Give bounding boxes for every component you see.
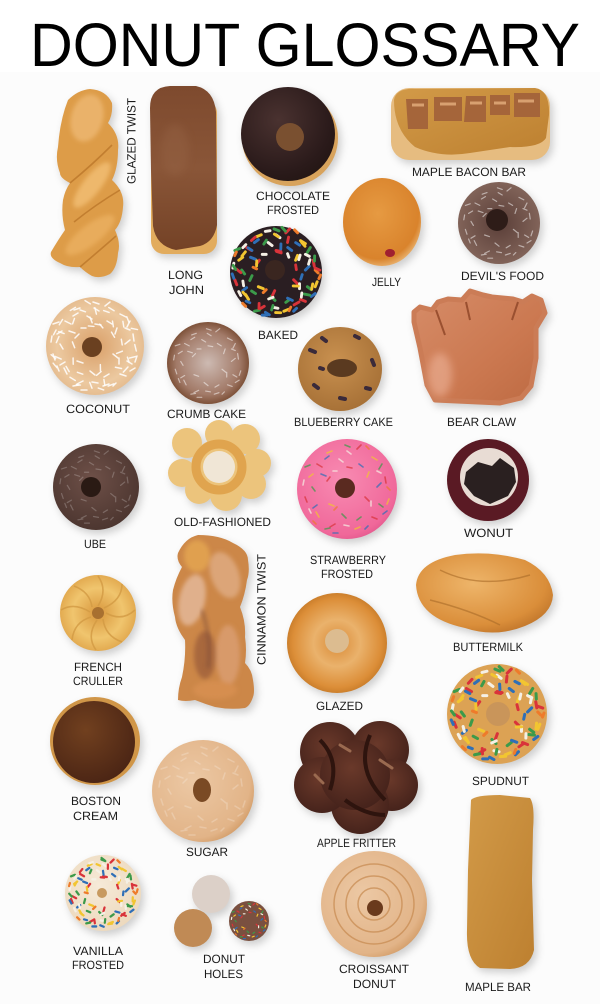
label: boston cream <box>71 794 121 823</box>
donut: jelly <box>343 178 421 266</box>
label: boston cream: BOSTON <box>71 794 121 808</box>
label: strawberry frosted <box>310 553 386 581</box>
donut: glazed twist <box>51 89 123 277</box>
label: sugar: SUGAR <box>186 845 228 859</box>
label: crumb cake: CRUMB CAKE <box>167 407 246 421</box>
label: wonut: WONUT <box>464 526 514 540</box>
label: maple bacon bar: MAPLE BACON BAR <box>412 165 526 179</box>
label: french cruller <box>73 660 123 688</box>
donut: coconut <box>34 285 154 405</box>
label: strawberry frosted: STRAWBERRY <box>310 553 386 567</box>
donut: croissant donut <box>321 851 427 957</box>
donut holes <box>174 875 269 947</box>
label: donut holes <box>203 952 246 981</box>
label: strawberry frosted: FROSTED <box>321 567 373 581</box>
label: donut holes: HOLES <box>204 967 243 981</box>
label: long john <box>168 268 204 297</box>
label: coconut: COCONUT <box>66 402 131 416</box>
donut: wonut <box>447 439 529 521</box>
label: french cruller: FRENCH <box>74 660 122 674</box>
donut: glazed <box>287 593 387 693</box>
label: croissant donut: DONUT <box>353 977 397 991</box>
label: jelly: JELLY <box>372 275 401 289</box>
label: ube: UBE <box>84 537 106 551</box>
label: long john: LONG <box>168 268 203 282</box>
donut: buttermilk <box>416 553 553 633</box>
donut: strawberry frosted <box>297 439 397 539</box>
label: vanilla frosted <box>72 944 124 972</box>
label: apple fritter: APPLE FRITTER <box>317 836 396 850</box>
label: chocolate frosted: FROSTED <box>267 203 319 217</box>
donut: maple bar <box>467 795 534 969</box>
label: maple bar: MAPLE BAR <box>465 980 531 994</box>
label: long john: JOHN <box>169 283 204 297</box>
label: bear claw: BEAR CLAW <box>447 415 517 429</box>
label: devil's food: DEVIL'S FOOD <box>461 269 544 283</box>
label: cinnamon twist: CINNAMON TWIST <box>254 553 268 665</box>
label: vanilla frosted: VANILLA <box>73 944 123 958</box>
label: old-fashioned: OLD-FASHIONED <box>174 515 271 529</box>
label: croissant donut: CROISSANT <box>339 962 410 976</box>
donut: vanilla frosted <box>59 849 147 937</box>
donut: devil's food <box>458 182 540 264</box>
donut: blueberry cake <box>298 327 382 411</box>
title: DONUT GLOSSARY <box>30 11 580 79</box>
donut: boston cream <box>50 697 140 785</box>
label: vanilla frosted: FROSTED <box>72 958 124 972</box>
donut: ube <box>53 444 139 530</box>
label: buttermilk: BUTTERMILK <box>453 640 523 654</box>
donut: spudnut <box>439 656 555 772</box>
donut: chocolate frosted <box>241 87 338 186</box>
label: blueberry cake: BLUEBERRY CAKE <box>294 415 393 429</box>
label: chocolate frosted: CHOCOLATE <box>256 189 330 203</box>
donut: maple bacon bar <box>391 88 550 160</box>
label: croissant donut <box>339 962 410 991</box>
donut: french cruller <box>60 575 136 651</box>
donut: crumb cake <box>167 322 249 404</box>
donut: cinnamon twist <box>172 535 254 709</box>
label: french cruller: CRULLER <box>73 674 123 688</box>
label: spudnut: SPUDNUT <box>472 774 530 788</box>
donut: baked <box>222 218 329 325</box>
label: donut holes: DONUT <box>203 952 246 966</box>
donut: long john <box>150 86 217 254</box>
donut: bear claw <box>414 291 545 403</box>
label: glazed twist: GLAZED TWIST <box>124 97 138 184</box>
label: glazed: GLAZED <box>316 699 363 713</box>
label: chocolate frosted <box>256 189 330 217</box>
donut: apple fritter <box>294 721 418 834</box>
donut: old-fashioned <box>168 420 271 511</box>
label: boston cream: CREAM <box>73 809 118 823</box>
donut: sugar <box>152 740 254 842</box>
label: baked: BAKED <box>258 328 298 342</box>
